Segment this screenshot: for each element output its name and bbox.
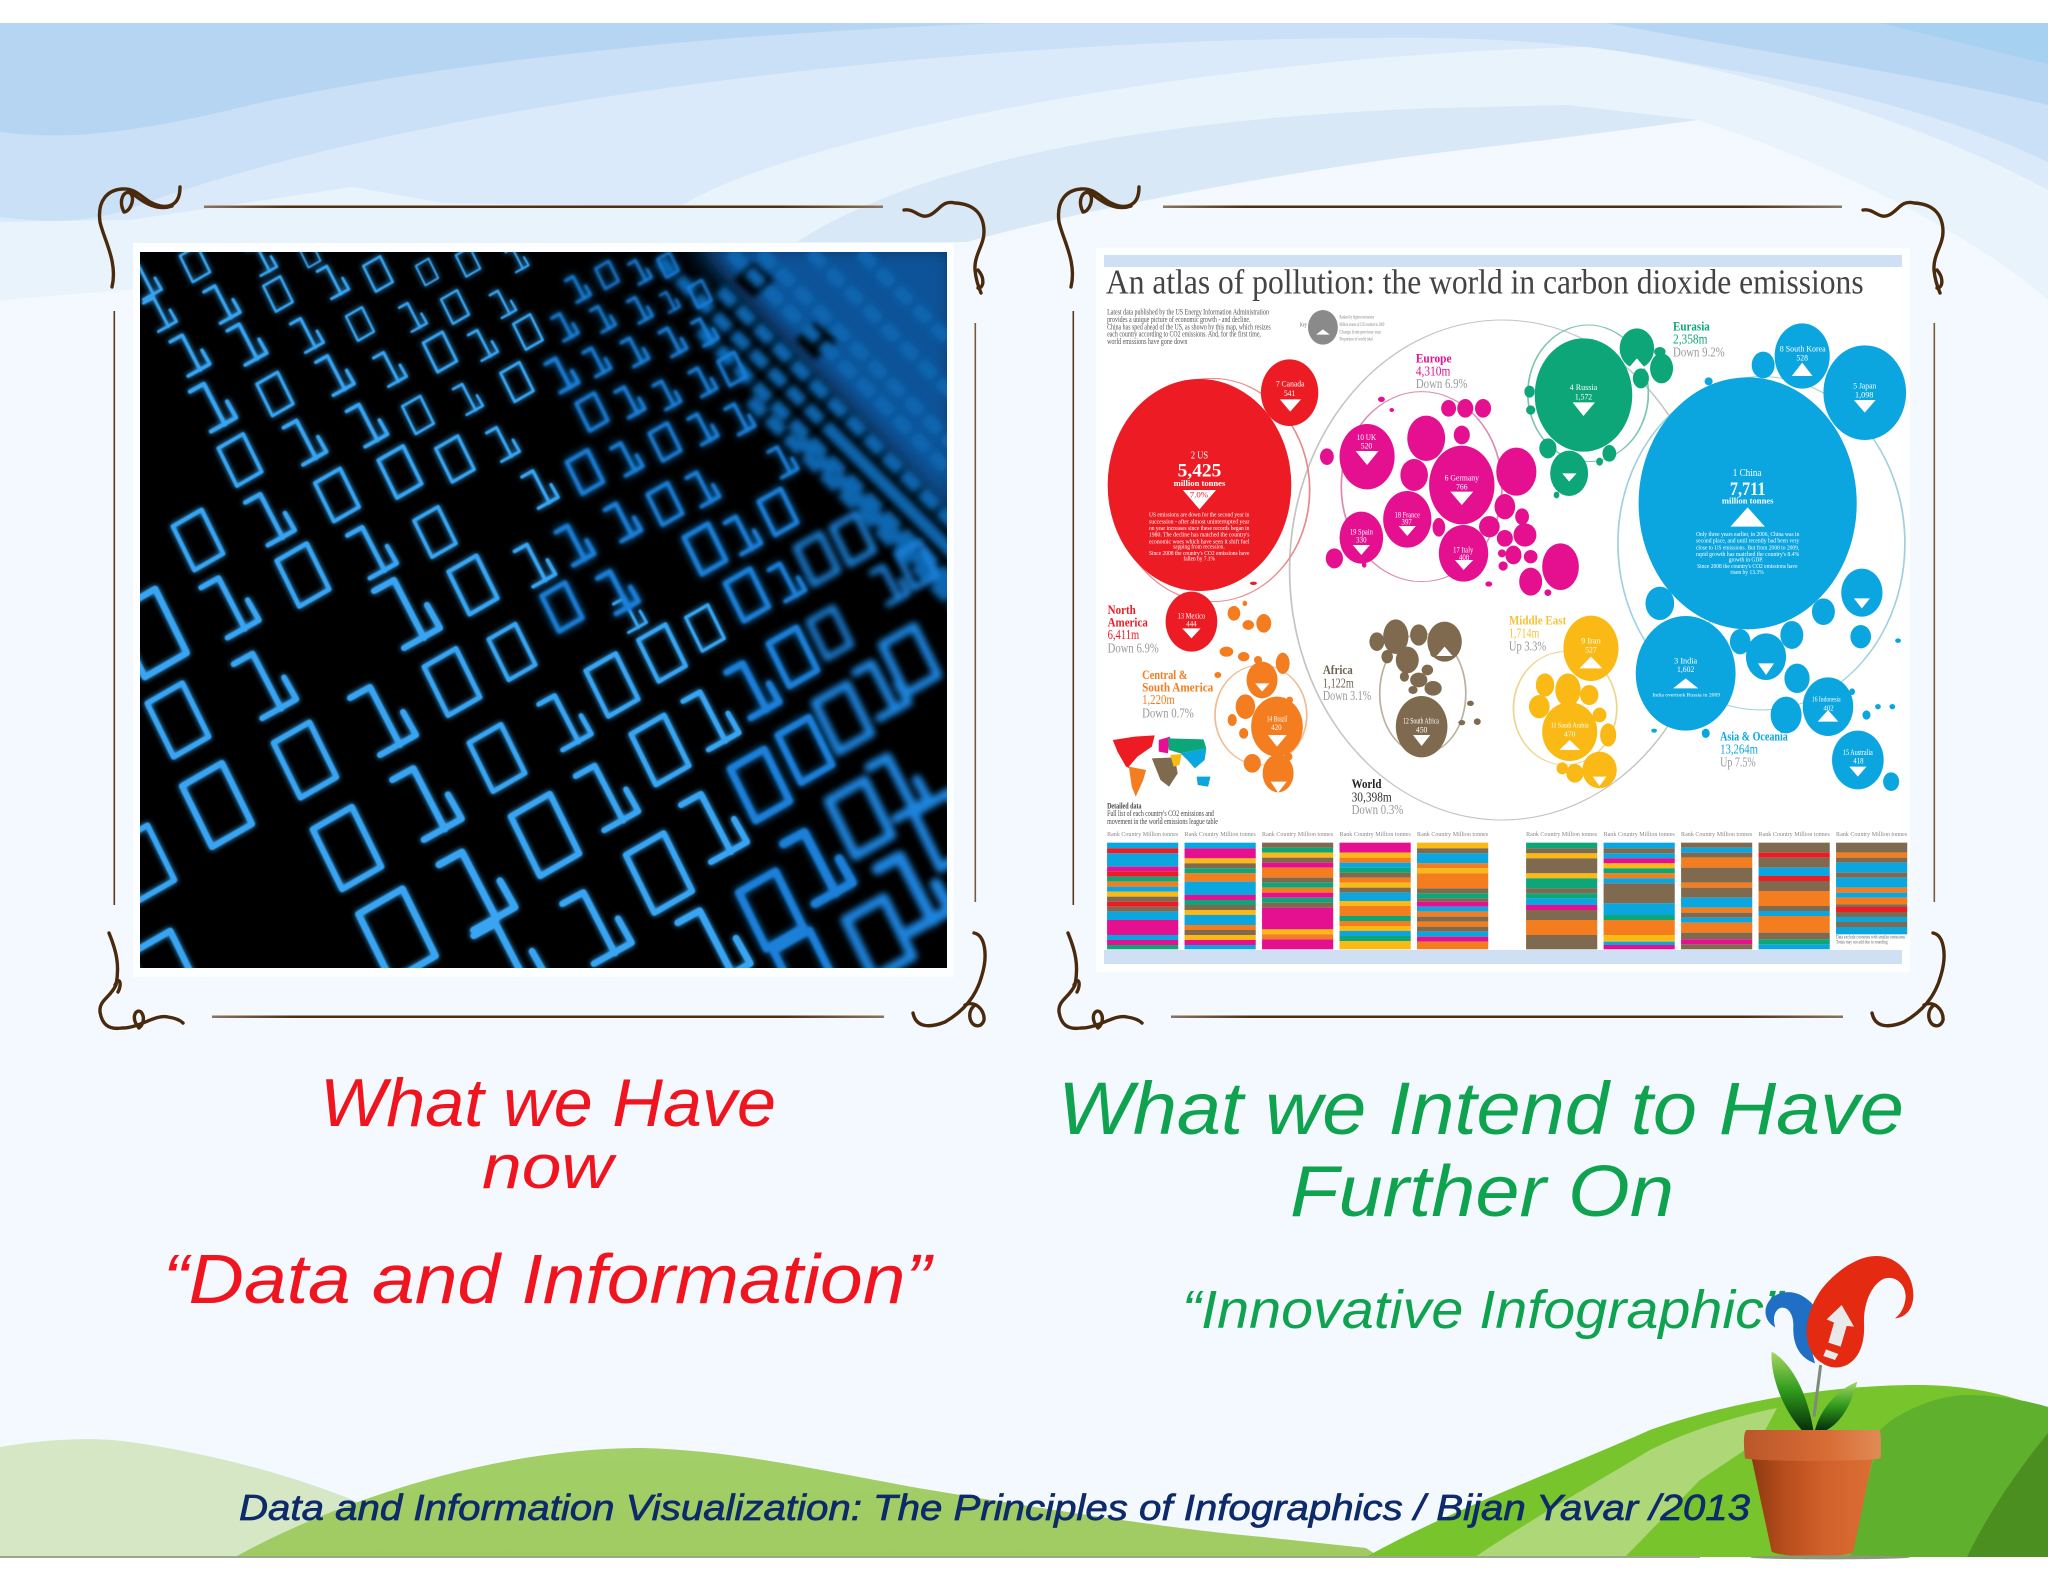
corner flourish bottom right <box>913 933 985 1026</box>
league table headers: Rank Country Million tonnes <box>1604 830 1675 837</box>
frame right rule <box>974 323 976 902</box>
atlas content: Down 6.9% <box>1108 641 1159 656</box>
bubble labels: countries: 1,602 <box>1677 664 1694 674</box>
region label: europe: 4,310m <box>1416 364 1451 379</box>
corner flourish top right <box>904 202 984 293</box>
region label: eurasia: Eurasia <box>1673 319 1710 334</box>
bubble labels: countries: 528 <box>1796 353 1808 363</box>
atlas key: Change from previous year <box>1340 330 1381 335</box>
region label: north america: 6,411m <box>1108 628 1139 643</box>
eurasia outline <box>1528 325 1648 462</box>
region label: north america <box>1108 603 1159 656</box>
region label: middle east: 1,714m <box>1509 626 1540 641</box>
bubbles: africa <box>1369 619 1481 757</box>
region label: africa: 1,122m <box>1323 676 1354 691</box>
bubble label: china: rapid growth has matched the country's 8.4% <box>1696 551 1799 558</box>
atlas content: Latest data published by the US Energy Information Administration <box>1107 308 1269 317</box>
bubble label: us: million tonnes <box>1174 478 1225 488</box>
bubble label: us: 5,425 <box>1178 460 1221 481</box>
atlas content: Since 2008 the country's CO2 emissions have <box>1697 563 1798 570</box>
bubble label: china <box>1696 467 1799 576</box>
atlas content: Ranked by highest emissions <box>1340 315 1374 320</box>
bubble labels: countries: 3 India <box>1674 656 1698 665</box>
panel: carbon emissions atlas <box>1096 248 1910 972</box>
caption line: what we have: What we Have <box>320 1065 776 1141</box>
region label: asia and oceania: 13,264m <box>1720 742 1758 757</box>
frame left rule <box>1072 311 1074 905</box>
region label: central and south america: Central & <box>1142 668 1187 682</box>
red petal <box>1807 1256 1913 1368</box>
bubble labels: countries: 408 <box>1459 552 1469 562</box>
bubble label: us: sapping from recession. <box>1173 543 1225 550</box>
region label: asia and oceania: Up 7.5% <box>1720 755 1756 770</box>
league table headers: Rank Country Million tonnes <box>1681 830 1752 837</box>
atlas content: on year increases since these records began in <box>1149 525 1250 532</box>
bubble labels: countries: 450 <box>1416 725 1427 735</box>
league table headers: Rank Country Million tonnes <box>1107 830 1178 837</box>
atlas content: 1980. The decline has matched the country's <box>1149 532 1250 539</box>
atlas content: second place, and until recently had been very <box>1696 538 1799 545</box>
bubble label: us: 2 US <box>1191 450 1208 462</box>
frame left rule <box>114 311 115 905</box>
league table headers: Rank Country Million tonnes <box>1759 830 1830 837</box>
central america outline <box>1215 665 1307 765</box>
asia outline <box>1618 377 1905 710</box>
atlas content: each country according to CO2 emissions. And, for the first time, <box>1107 330 1261 339</box>
corner flourish bottom left <box>1059 933 1142 1028</box>
bubble labels: countries: 11 Saudi Arabia <box>1551 722 1589 729</box>
atlas content: Asia & Oceania <box>1720 729 1788 744</box>
left leaf <box>1772 1352 1813 1430</box>
image frame <box>133 243 954 977</box>
league table colour rows <box>1107 843 1907 949</box>
bubble labels: countries: 7 Canada <box>1276 379 1305 389</box>
bubble labels: countries: 397 <box>1402 517 1412 527</box>
league table headers: Rank Country Million tonnes <box>1417 830 1488 837</box>
caption line: data and information: “Data and Information” <box>163 1240 934 1318</box>
frame bottom rule <box>212 1016 884 1018</box>
text: Data exclude countries with smaller emissions <box>1836 934 1905 940</box>
league table footnote: Totals may not add due to rounding <box>1836 938 1888 945</box>
bubble labels: countries: 14 Brazil <box>1267 714 1288 724</box>
bubble labels: countries: 8 South Korea <box>1780 344 1826 354</box>
atlas intro text: world emissions have gone down <box>1107 338 1188 346</box>
atlas content: 15 Australia <box>1843 747 1873 757</box>
atlas sheet <box>1104 255 1902 964</box>
league table headers: Rank Country Million tonnes <box>1526 830 1597 837</box>
bubble labels: countries: 520 <box>1361 441 1372 451</box>
atlas content: US emissions are down for the second year in <box>1149 511 1250 519</box>
atlas content: Since 2008 the country's CO2 emissions have <box>1149 550 1249 557</box>
region label: africa <box>1323 663 1371 704</box>
region label: europe: Europe <box>1416 351 1452 366</box>
corner flourish top right <box>1863 202 1943 293</box>
bubble labels: countries: 418 <box>1853 756 1864 765</box>
atlas content: Full list of each country's CO2 emissions and <box>1107 810 1214 818</box>
pot rim <box>1744 1430 1881 1461</box>
region label: world: World <box>1352 777 1381 791</box>
caption line: now: now <box>482 1133 618 1202</box>
region label: central and south america: Down 0.7% <box>1142 706 1194 721</box>
region label: north america: North <box>1108 603 1136 617</box>
africa outline <box>1380 633 1466 753</box>
white arrow markers in bubbles <box>1182 358 1876 793</box>
bubble labels: countries: 17 Italy <box>1453 545 1474 555</box>
bubble label: china: risen by 13.3% <box>1730 569 1764 576</box>
corner flourish bottom left <box>100 933 183 1028</box>
atlas content: close to US emissions. But from 2008 to 2009, <box>1696 544 1799 551</box>
region label: middle east: Up 3.3% <box>1509 639 1546 654</box>
bubble labels: countries: 6 Germany <box>1445 473 1480 483</box>
right leaf <box>1815 1382 1857 1430</box>
bubble label: us <box>1149 450 1250 563</box>
bubble labels: countries: 470 <box>1564 731 1575 739</box>
bubble label: china: 7,711 <box>1730 479 1765 499</box>
caption line: what we intend to have: What we Intend to Have <box>1058 1067 1904 1150</box>
pot body <box>1752 1458 1873 1557</box>
region label: north america: America <box>1108 615 1148 630</box>
bubble labels: countries: 420 <box>1271 722 1282 732</box>
bubble labels: countries: 330 <box>1356 535 1367 545</box>
bubble label: us: succession - after almost uninterrupted year <box>1149 518 1250 525</box>
atlas key: Key <box>1300 322 1307 329</box>
bubble labels: countries: 444 <box>1186 619 1197 629</box>
region label: europe <box>1416 351 1468 392</box>
caption line: further on: Further On <box>1290 1152 1674 1232</box>
frame bottom rule <box>1171 1016 1843 1018</box>
icon: flower pot logo <box>1744 1256 1913 1559</box>
bubble labels: countries: 402 <box>1823 705 1834 713</box>
bubbles: north america <box>1108 359 1318 652</box>
league table headers: Rank Country Million tonnes <box>1340 830 1411 837</box>
corner flourish bottom right <box>1872 933 1944 1026</box>
bubble labels: countries: 5 Japan <box>1853 381 1876 390</box>
region label: world: 30,398m <box>1352 790 1392 805</box>
league table footnote <box>1836 934 1905 945</box>
middle east outline <box>1513 652 1617 765</box>
atlas key: Proportion of world total <box>1340 337 1373 342</box>
frame top rule <box>1163 206 1842 208</box>
bubble label: china: growth in GDP. <box>1729 556 1763 563</box>
bubble labels: countries <box>1178 344 1876 765</box>
stem <box>1814 1365 1821 1417</box>
bubble labels: countries: 9 Iran <box>1581 636 1601 645</box>
bubbles: middle east <box>1529 616 1619 788</box>
europe outline <box>1341 392 1502 582</box>
bubbles: asia and oceania <box>1636 323 1906 791</box>
blue petal <box>1765 1292 1817 1363</box>
bubble labels: countries: India overtook Russia in 2009 <box>1652 692 1720 698</box>
bubble label: us: 7.0% <box>1190 491 1208 499</box>
bubble labels: countries: 13 Mexico <box>1178 611 1205 621</box>
bubble labels: countries: 19 Spain <box>1350 527 1373 537</box>
binary digits picture <box>140 252 947 968</box>
bubble labels: countries: 527 <box>1585 645 1597 655</box>
atlas content: movement in the world emissions league table <box>1107 818 1218 826</box>
league table headers: Rank Country Million tonnes <box>1836 830 1907 837</box>
bubble labels: countries: 766 <box>1456 482 1468 491</box>
atlas content <box>1106 263 1907 949</box>
bubble labels: countries: 16 Indonesia <box>1812 696 1841 704</box>
atlas bottom band <box>1104 950 1902 964</box>
region label: world <box>1352 777 1403 818</box>
league table headers: Rank Country Million tonnes <box>1185 830 1256 837</box>
region label: central and south america <box>1142 668 1213 721</box>
region label: central and south america: South America <box>1142 680 1213 694</box>
bubbles: europe <box>1320 397 1579 596</box>
atlas intro text <box>1107 308 1271 346</box>
atlas content: Down 6.9% <box>1416 377 1468 392</box>
corner flourish top left <box>1059 187 1139 287</box>
region label: central and south america: 1,220m <box>1142 693 1175 708</box>
panel: right ornamental frame <box>1059 187 1944 1028</box>
panel: binary data image <box>133 243 954 977</box>
region label: middle east <box>1509 613 1566 654</box>
right caption <box>1058 1067 1904 1340</box>
bubbles: eurasia <box>1524 328 1673 498</box>
atlas frame <box>1096 248 1910 972</box>
frame top rule <box>204 206 883 208</box>
atlas key <box>1300 310 1385 345</box>
white arrow <box>1823 1305 1854 1360</box>
atlas content: Down 0.3% <box>1352 803 1403 818</box>
league table headers <box>1107 830 1907 837</box>
atlas content: provides a unique picture of economic growth - and decline. <box>1107 316 1251 324</box>
bubble labels: countries: 541 <box>1284 388 1295 398</box>
bubble labels: countries: 1,098 <box>1855 390 1873 399</box>
region label: africa: Africa <box>1323 663 1353 677</box>
bubble labels: countries: 1,572 <box>1575 392 1592 401</box>
pot base shadow <box>1750 1555 1910 1559</box>
mini world map <box>1113 735 1210 797</box>
atlas content: economic woes which have seen it shift fuel <box>1149 538 1250 545</box>
bubble labels: countries: 10 UK <box>1357 432 1376 442</box>
league table headers: Rank Country Million tonnes <box>1262 830 1333 837</box>
atlas content: Down 3.1% <box>1323 689 1371 704</box>
atlas top band <box>1104 255 1902 267</box>
panel: left ornamental frame <box>100 187 985 1028</box>
atlas content: Million tonnes of CO2 emitted in 2009 <box>1340 322 1385 327</box>
bubble labels: countries: 18 France <box>1395 510 1420 519</box>
caption line: innovative infographic: “Innovative Infographic” <box>1182 1280 1785 1340</box>
detailed data note: Detailed data <box>1107 802 1142 810</box>
frame right rule <box>1934 323 1935 902</box>
north america outline <box>1115 378 1310 602</box>
bubble label: china: million tonnes <box>1722 496 1774 505</box>
bubble labels: countries: 4 Russia <box>1570 382 1598 392</box>
bubbles: central and south america <box>1214 601 1303 792</box>
bubble label: china: 1 China <box>1733 467 1762 479</box>
bubble labels: countries: 12 South Africa <box>1403 717 1439 725</box>
region label: middle east: Middle East <box>1509 613 1566 628</box>
atlas content: China has sped ahead of the US, as shown by this map, which resizes <box>1107 323 1271 331</box>
corner flourish top left <box>100 187 180 287</box>
region label: eurasia <box>1673 319 1725 360</box>
world outline <box>1290 320 1714 820</box>
left caption <box>163 1065 934 1318</box>
region label: eurasia: 2,358m <box>1673 332 1708 347</box>
green hills footer background <box>0 1385 2048 1558</box>
bubble label: us: fallen by 7.1% <box>1183 555 1215 563</box>
footer credit: Data and Information Visualization: The Principles of Infographics / Bijan Yavar /2013 <box>239 1487 1750 1528</box>
atlas content: Down 9.2% <box>1673 345 1725 360</box>
atlas content: Only three years earlier, in 2006, China was in <box>1696 531 1799 538</box>
region label: asia and oceania <box>1720 729 1788 770</box>
detailed data note <box>1107 802 1218 826</box>
